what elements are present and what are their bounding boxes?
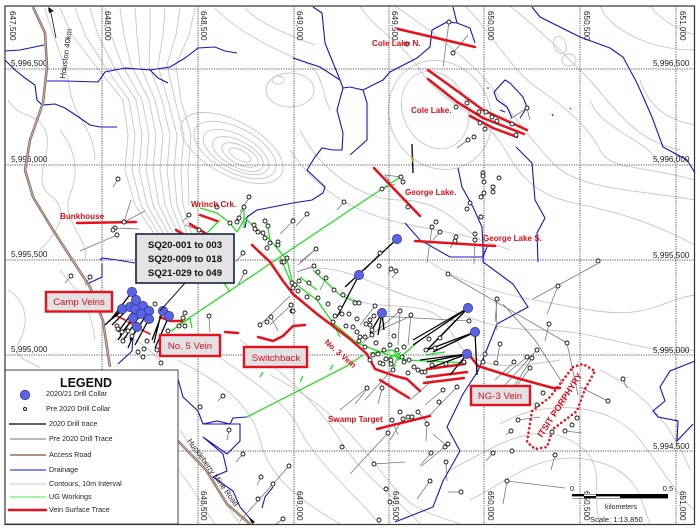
- grid coordinate labels: 648,500: [199, 11, 208, 41]
- target name labels: George Lake.: [405, 188, 456, 197]
- callout: drill hole ranges: SQ20-009 to 018: [148, 254, 223, 265]
- scale bar: kilometers: [605, 504, 637, 511]
- legend: drainage: [10, 465, 78, 474]
- scale bar: 0.5: [663, 484, 673, 493]
- grid coordinate labels: 649,500: [391, 491, 400, 521]
- callout: drill hole ranges: SQ20-001 to 003: [148, 240, 222, 251]
- legend: pre 2020 drill trace: [10, 434, 113, 443]
- label: Huckleberry Mine Road: [185, 437, 255, 524]
- legend: UG workings: UG Workings: [49, 492, 92, 501]
- legend: 2020/21 drill collar: 2020/21 Drill Collar: [46, 389, 108, 398]
- grid coordinate labels: 647,500: [8, 11, 17, 41]
- grid coordinate labels: 5,996,500: [653, 59, 690, 68]
- target name labels: Cole Lake.: [411, 106, 452, 115]
- pre 2020 drill traces: [65, 22, 627, 524]
- grid coordinate labels: 649,500: [390, 11, 399, 41]
- legend: pre 2020 drill trace: Pre 2020 Drill Trace: [49, 434, 113, 443]
- legend: contours: [10, 479, 122, 488]
- label: NG-3 Vein: NG-3 Vein: [478, 391, 522, 402]
- grid coordinate labels: 649,000: [295, 491, 304, 521]
- legend: pre 2020 drill collar: Pre 2020 Drill Collar: [46, 404, 111, 413]
- itsit porphyry dotted outline: [527, 364, 595, 449]
- callout: drill hole ranges: [136, 234, 234, 283]
- label: No. 5 Vein: [160, 335, 220, 356]
- grid coordinate labels: 5,995,500: [653, 251, 690, 260]
- label: Houston 40km with arrow: [48, 7, 74, 79]
- scale bar: Scale: 1:13,850: [590, 515, 643, 524]
- legend: 2020 drill trace: [9, 419, 97, 428]
- pre 2020 drill collars: [69, 20, 625, 522]
- grid coordinate labels: 649,000: [295, 11, 304, 41]
- grid coordinate labels: 5,995,000: [653, 346, 690, 355]
- label: Switchback: Switchback: [252, 353, 300, 364]
- access road: [25, 7, 250, 524]
- target name labels: Wrinch Crk.: [191, 200, 236, 209]
- legend: vein surface trace: [9, 505, 110, 514]
- legend: contours: Contours, 10m Interval: [49, 479, 122, 488]
- label: Camp Veins: Camp Veins: [53, 297, 105, 308]
- target name labels: Bunkhouse: [60, 212, 105, 221]
- label: Huckleberry Mine Road: Huckleberry Mine Road: [185, 437, 241, 508]
- grid coordinate labels: 650,500: [582, 11, 591, 41]
- grid coordinate labels: 648,000: [103, 11, 112, 41]
- 2020 drill traces: [105, 239, 477, 375]
- grid coordinate labels: 5,995,000: [11, 345, 48, 354]
- 2020/21 drill collars: [117, 234, 480, 359]
- vein surface traces: [77, 29, 560, 429]
- grid coordinate labels: 648,500: [199, 491, 208, 521]
- UG workings: [171, 177, 467, 417]
- label: No. 5 Vein: No. 5 Vein: [168, 341, 212, 352]
- leader line to callout: [160, 283, 185, 311]
- legend: UG workings: [10, 492, 92, 501]
- label: Switchback: [244, 347, 307, 367]
- legend: access road: Access Road: [49, 450, 91, 459]
- target name labels: Swamp Target: [328, 415, 383, 424]
- grid coordinate labels: 5,996,000: [11, 155, 48, 164]
- grid coordinate labels: 650,500: [582, 491, 591, 521]
- legend: access road: [10, 450, 91, 459]
- callout: drill hole ranges: SQ21-029 to 049: [148, 268, 222, 279]
- grid coordinate labels: 651,000: [678, 11, 687, 41]
- target name labels: No. 3 Vein: [323, 338, 358, 370]
- grid coordinate labels: 5,995,500: [11, 250, 48, 259]
- grid coordinate labels: 5,996,000: [653, 155, 690, 164]
- label: NG-3 Vein: [471, 386, 530, 405]
- grid coordinate labels: 651,000: [678, 491, 687, 521]
- drill hole marker: [412, 144, 413, 173]
- legend: 2020/21 drill collar: [20, 389, 108, 400]
- grid coordinate labels: 5,996,500: [11, 59, 48, 68]
- label: Houston 40km with arrow: Houston 40km: [58, 28, 74, 79]
- legend: [5, 370, 178, 524]
- grid coordinate labels: 5,994,500: [653, 442, 690, 451]
- legend: vein surface trace: Vein Surface Trace: [49, 505, 110, 514]
- label: Camp Veins: [46, 292, 112, 312]
- legend: 2020 drill trace: 2020 Drill trace: [49, 419, 97, 428]
- scale bar: 0: [570, 484, 574, 493]
- grid coordinate labels: 650,000: [486, 11, 495, 41]
- target name labels: Cole Lake N.: [372, 39, 421, 48]
- legend: drainage: Drainage: [49, 465, 78, 474]
- target name labels: [60, 39, 584, 439]
- target name labels: ITSIT PORPHYRY: [535, 371, 584, 439]
- legend title: LEGEND: [60, 376, 112, 390]
- target name labels: George Lake S.: [483, 234, 542, 243]
- scale bar: [570, 484, 673, 524]
- grid coordinate labels: 650,000: [486, 491, 495, 521]
